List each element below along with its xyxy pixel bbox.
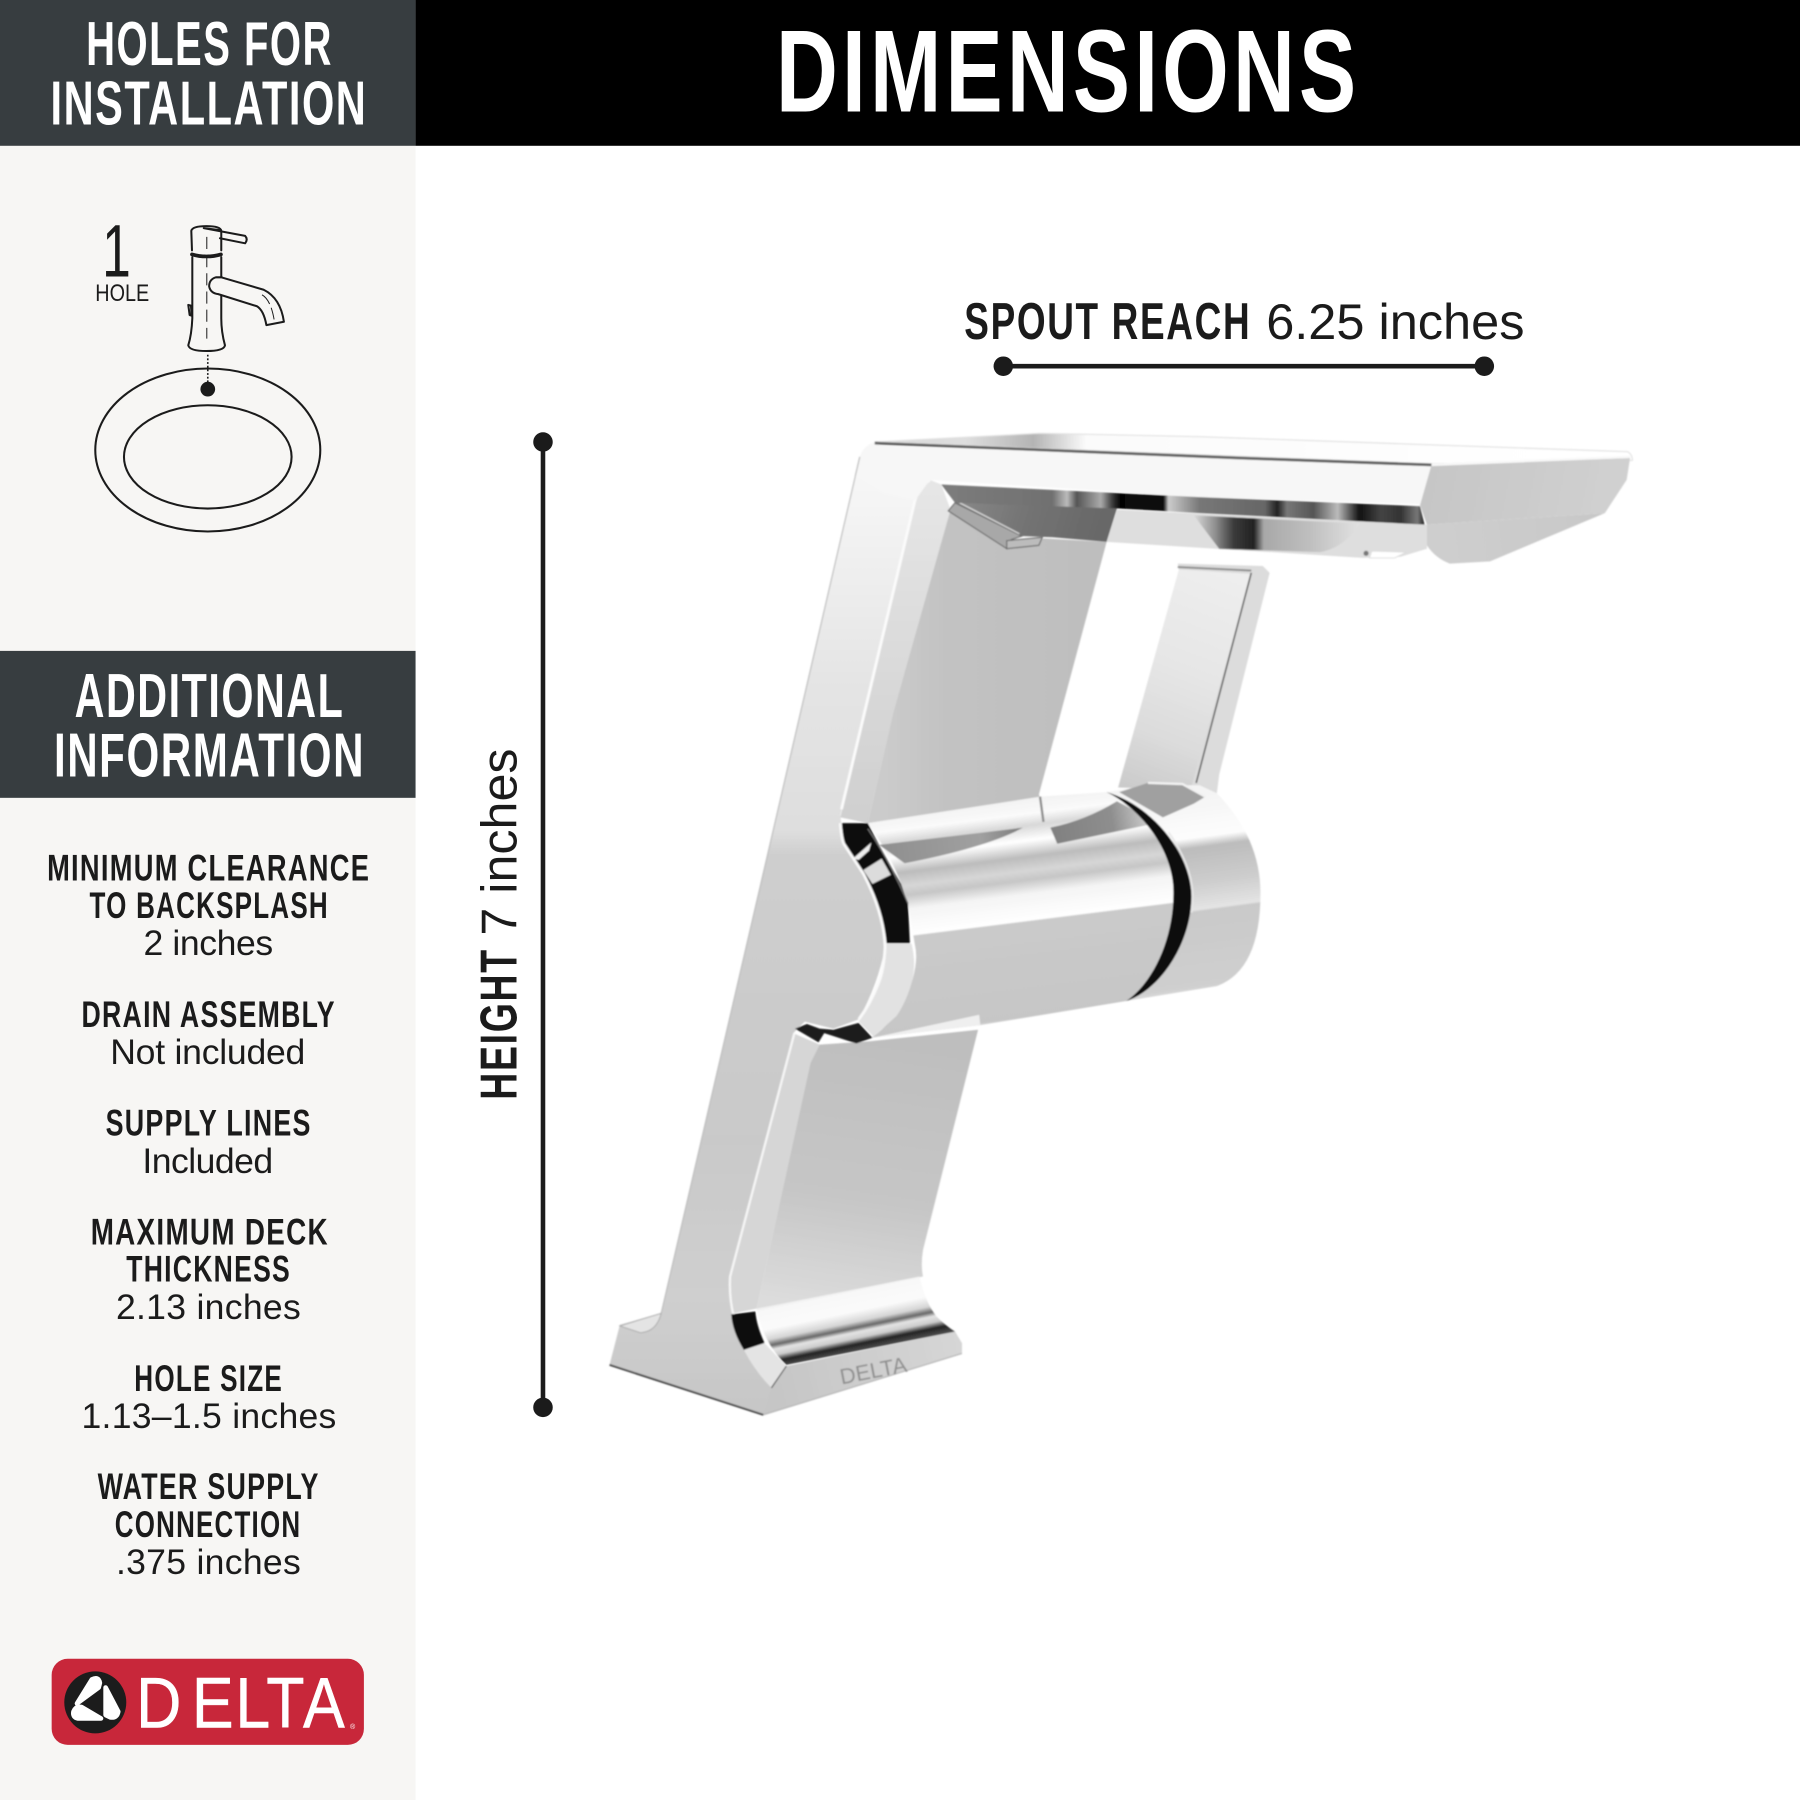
text block: drain assembly: Not included [110,1032,305,1072]
heading: additional information: ADDITIONAL [75,662,344,731]
text block: supply lines [106,1102,312,1181]
header: dimensions title bar [416,0,1800,146]
text block: water supply connection: CONNECTION [115,1504,301,1545]
dimension: height [470,432,553,1417]
lower body column [730,1030,978,1316]
outer body and base plate [610,442,962,1415]
text block: minimum clearance [47,847,370,963]
handle lever [1118,564,1270,793]
heading: additional information: INFORMATION [54,722,365,791]
dimension: spout reach [964,292,1524,376]
logo: delta [52,1659,364,1745]
upper body face [840,480,1117,823]
header: dimensions title bar: DIMENSIONS [776,5,1360,136]
text block: supply lines: Included [142,1141,273,1181]
dimension: spout reach: SPOUT REACH [964,292,1251,350]
dimension: height: 7 inches [471,748,528,936]
text block: minimum clearance: MINIMUM CLEARANCE [47,847,370,888]
icon: one hole faucet and sink diagram: HOLE [95,280,149,307]
text block: maximum deck thickness [91,1211,329,1327]
text block: maximum deck thickness: 2.13 inches [116,1287,301,1327]
text block: drain assembly [82,994,336,1072]
heading: holes for installation [0,0,416,146]
text block: hole size [82,1358,336,1436]
icon: one hole faucet and sink diagram: 1 [102,209,131,293]
text block: supply lines: SUPPLY LINES [106,1102,312,1143]
heading: holes for installation: INSTALLATION [51,70,367,139]
text block: minimum clearance: TO BACKSPLASH [90,885,329,926]
text block: water supply connection: WATER SUPPLY [98,1466,320,1507]
text block: water supply connection [98,1466,320,1582]
panel: left sidebar [0,0,416,1800]
text block: water supply connection: .375 inches [116,1542,301,1582]
text block: hole size: HOLE SIZE [134,1358,283,1399]
dimension: height: HEIGHT [470,948,528,1100]
chrome base collar [731,1277,955,1388]
text block: drain assembly: DRAIN ASSEMBLY [82,994,336,1035]
text block: maximum deck thickness: THICKNESS [126,1249,291,1290]
logo: delta: ® [350,1723,355,1731]
dimension: spout reach: 6.25 inches [1266,293,1524,350]
heading: holes for installation: HOLES FOR [86,10,333,79]
outer body and base plate: DELTA [838,1352,909,1389]
text block: minimum clearance: 2 inches [143,923,273,963]
text block: maximum deck thickness: MAXIMUM DECK [91,1211,329,1252]
logo: delta: DELTA [136,1664,345,1744]
icon: one hole faucet and sink diagram [95,209,320,532]
spout [855,433,1632,564]
text block: hole size: 1.13–1.5 inches [82,1396,336,1436]
cylinder valve body [795,783,1260,1043]
heading: additional information [0,651,416,798]
faucet illustration [610,433,1632,1415]
